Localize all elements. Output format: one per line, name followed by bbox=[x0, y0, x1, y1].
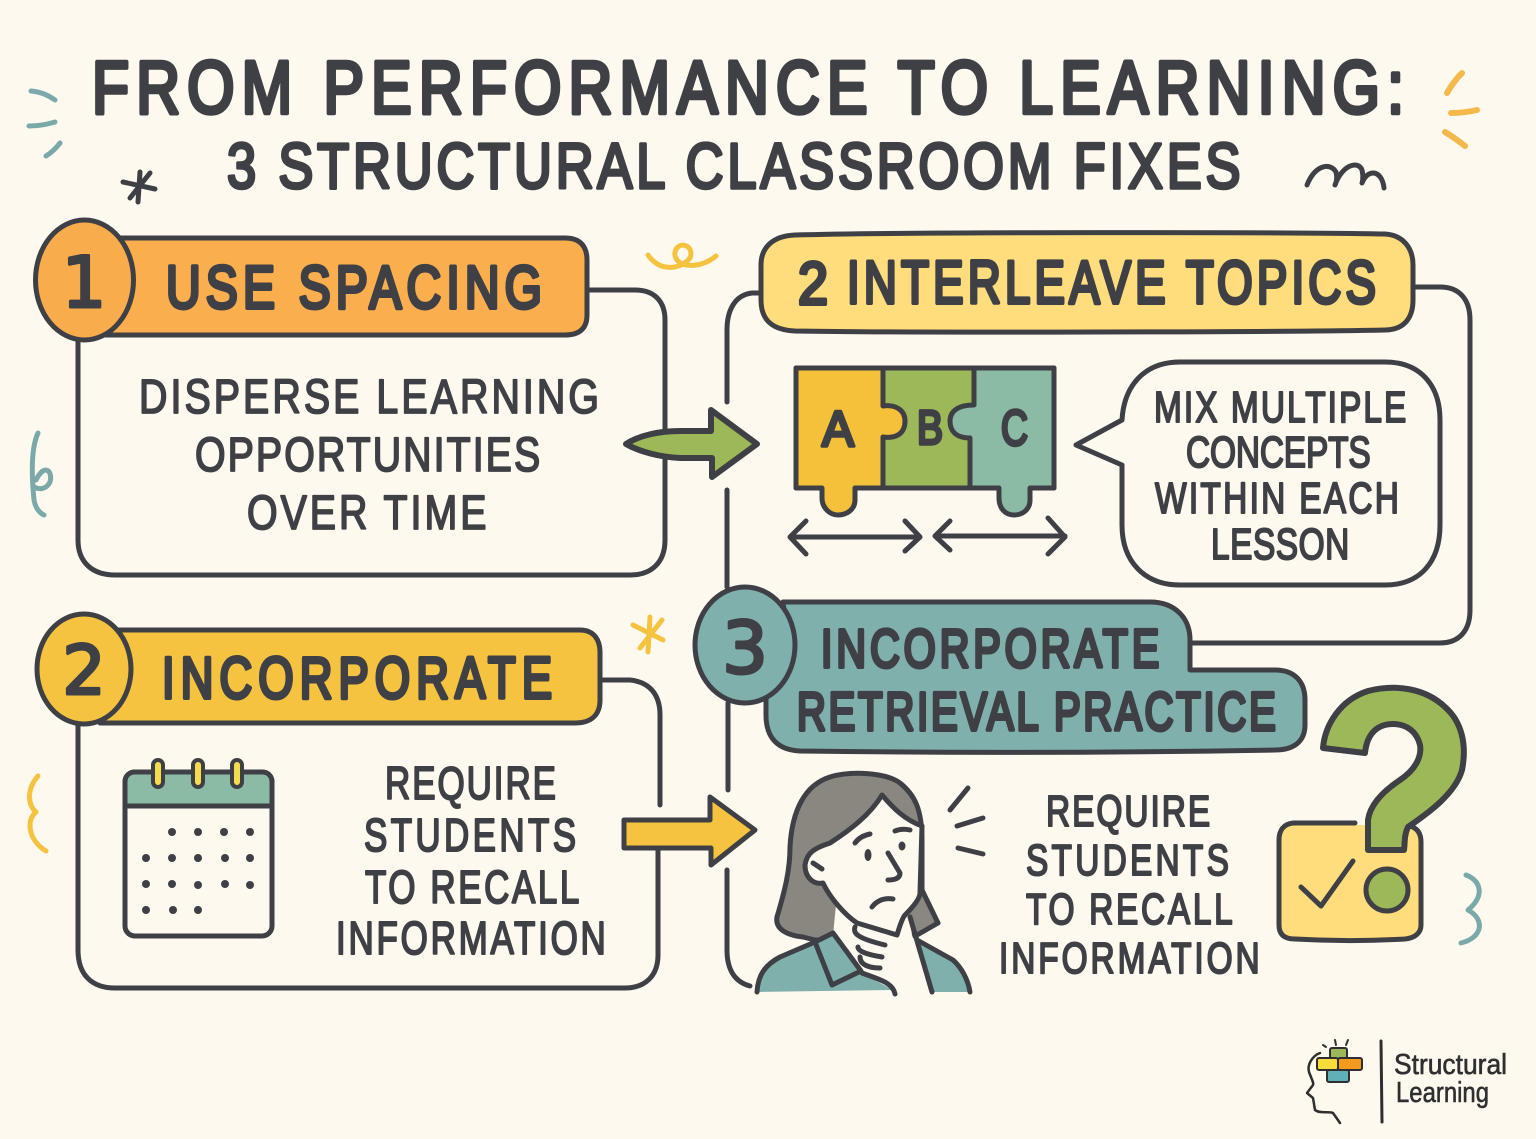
logo text: Structural bbox=[1394, 1049, 1507, 1081]
number badge: 1 bbox=[62, 242, 106, 324]
body text: STUDENTS bbox=[364, 809, 576, 861]
header bar bbox=[100, 238, 587, 335]
body text bbox=[139, 370, 599, 540]
icon: span arrows bbox=[790, 518, 1065, 554]
puzzle letters: C bbox=[1001, 400, 1028, 456]
icon: puzzle bbox=[796, 368, 1054, 515]
body text: TO RECALL bbox=[1026, 886, 1233, 934]
icon: question mark checkbox bbox=[1279, 688, 1464, 940]
body text: DISPERSE LEARNING bbox=[139, 370, 599, 424]
collar bbox=[815, 933, 861, 985]
doodle: dark star bbox=[123, 172, 155, 202]
left shoulder outline bbox=[757, 942, 815, 992]
calendar dots bbox=[142, 828, 254, 914]
logo: structural learning bbox=[1307, 1040, 1507, 1123]
number badge: 3 bbox=[722, 606, 768, 690]
puzzle letters: B bbox=[917, 402, 943, 455]
body text: INFORMATION bbox=[999, 935, 1260, 983]
panel: 2 incorporate bbox=[37, 614, 660, 988]
logo rays bbox=[1323, 1040, 1348, 1047]
logo blocks bbox=[1317, 1048, 1362, 1082]
doodle: yellow star bbox=[633, 617, 663, 652]
number badge bbox=[37, 614, 131, 724]
heading: INCORPORATE bbox=[162, 647, 552, 711]
puzzle piece C bbox=[950, 368, 1054, 515]
yellow box bbox=[1279, 825, 1421, 940]
body text bbox=[336, 757, 606, 964]
eyes and expression bbox=[855, 829, 910, 907]
panel: 1 use spacing bbox=[36, 220, 665, 575]
frame bbox=[78, 290, 665, 575]
number badge bbox=[36, 220, 134, 340]
number badge bbox=[695, 587, 795, 703]
box outline bbox=[1279, 823, 1421, 940]
right shoulder outline bbox=[917, 940, 970, 992]
neck and hand bbox=[833, 905, 932, 992]
header bar bbox=[761, 233, 1413, 332]
logo text bbox=[1394, 1049, 1507, 1109]
dot bbox=[1366, 869, 1408, 911]
arm and fingers bbox=[855, 917, 932, 994]
question mark bbox=[1323, 688, 1464, 850]
body text bbox=[999, 788, 1260, 983]
bubble text: WITHIN EACH bbox=[1155, 475, 1399, 523]
body text: TO RECALL bbox=[365, 861, 579, 913]
body text: STUDENTS bbox=[1026, 837, 1229, 885]
heading bbox=[797, 620, 1276, 743]
icon: calendar bbox=[125, 760, 272, 936]
decorative doodles: top left bbox=[29, 91, 60, 156]
puzzle piece A bbox=[796, 368, 905, 515]
calendar header bbox=[125, 772, 272, 806]
body text: OPPORTUNITIES bbox=[195, 428, 540, 482]
icon: thinking person bbox=[757, 773, 983, 994]
puzzle letters bbox=[822, 400, 1028, 457]
doodle: yellow loop bbox=[648, 245, 716, 267]
body text: REQUIRE bbox=[1046, 788, 1210, 836]
arrow: green bbox=[626, 410, 757, 477]
doodle: dark squiggle bbox=[1307, 165, 1384, 188]
heading: USE SPACING bbox=[166, 254, 542, 321]
number badge: 2 bbox=[62, 632, 106, 711]
heading: INTERLEAVE TOPICS bbox=[847, 250, 1376, 317]
bubble text: MIX MULTIPLE bbox=[1154, 384, 1406, 432]
bubble text bbox=[1154, 384, 1406, 569]
checkmark bbox=[1301, 861, 1353, 906]
speech bubble bbox=[1076, 362, 1440, 585]
doodle: teal brace bbox=[1461, 875, 1479, 943]
subtitle: 3 STRUCTURAL CLASSROOM FIXES bbox=[227, 131, 1241, 202]
arrow: yellow bbox=[624, 797, 755, 865]
logo divider bbox=[1381, 1041, 1382, 1122]
heading: 2 bbox=[798, 250, 828, 318]
body text: INFORMATION bbox=[336, 912, 606, 964]
doodle: yellow brace bbox=[30, 776, 46, 851]
calendar rings bbox=[153, 760, 242, 787]
heading: INCORPORATE bbox=[821, 620, 1159, 679]
face bbox=[805, 795, 922, 935]
header bar bbox=[766, 602, 1305, 752]
body text: REQUIRE bbox=[385, 757, 556, 809]
frame bbox=[78, 680, 660, 988]
bubble text: LESSON bbox=[1211, 521, 1349, 569]
doodle: teal curl bbox=[32, 433, 51, 515]
thinking ticks bbox=[950, 788, 983, 854]
panel: 3 incorporate retrieval practice bbox=[695, 587, 1464, 994]
heading: RETRIEVAL PRACTICE bbox=[797, 682, 1276, 743]
ear inner bbox=[813, 863, 822, 869]
panel: 2 interleave topics bbox=[727, 233, 1470, 643]
decorative doodles: top right bbox=[1445, 73, 1477, 146]
logo head bbox=[1307, 1053, 1340, 1123]
frame bbox=[727, 703, 750, 986]
right shoulder bbox=[917, 940, 970, 992]
frame bbox=[727, 287, 1470, 643]
logo text: Learning bbox=[1396, 1077, 1489, 1109]
header bar bbox=[100, 630, 600, 723]
left shoulder bbox=[757, 942, 893, 992]
hair bbox=[777, 773, 938, 940]
body text: OVER TIME bbox=[247, 486, 486, 540]
bubble text: CONCEPTS bbox=[1186, 429, 1371, 477]
title: FROM PERFORMANCE TO LEARNING: bbox=[92, 47, 1404, 129]
puzzle letters: A bbox=[822, 401, 855, 457]
